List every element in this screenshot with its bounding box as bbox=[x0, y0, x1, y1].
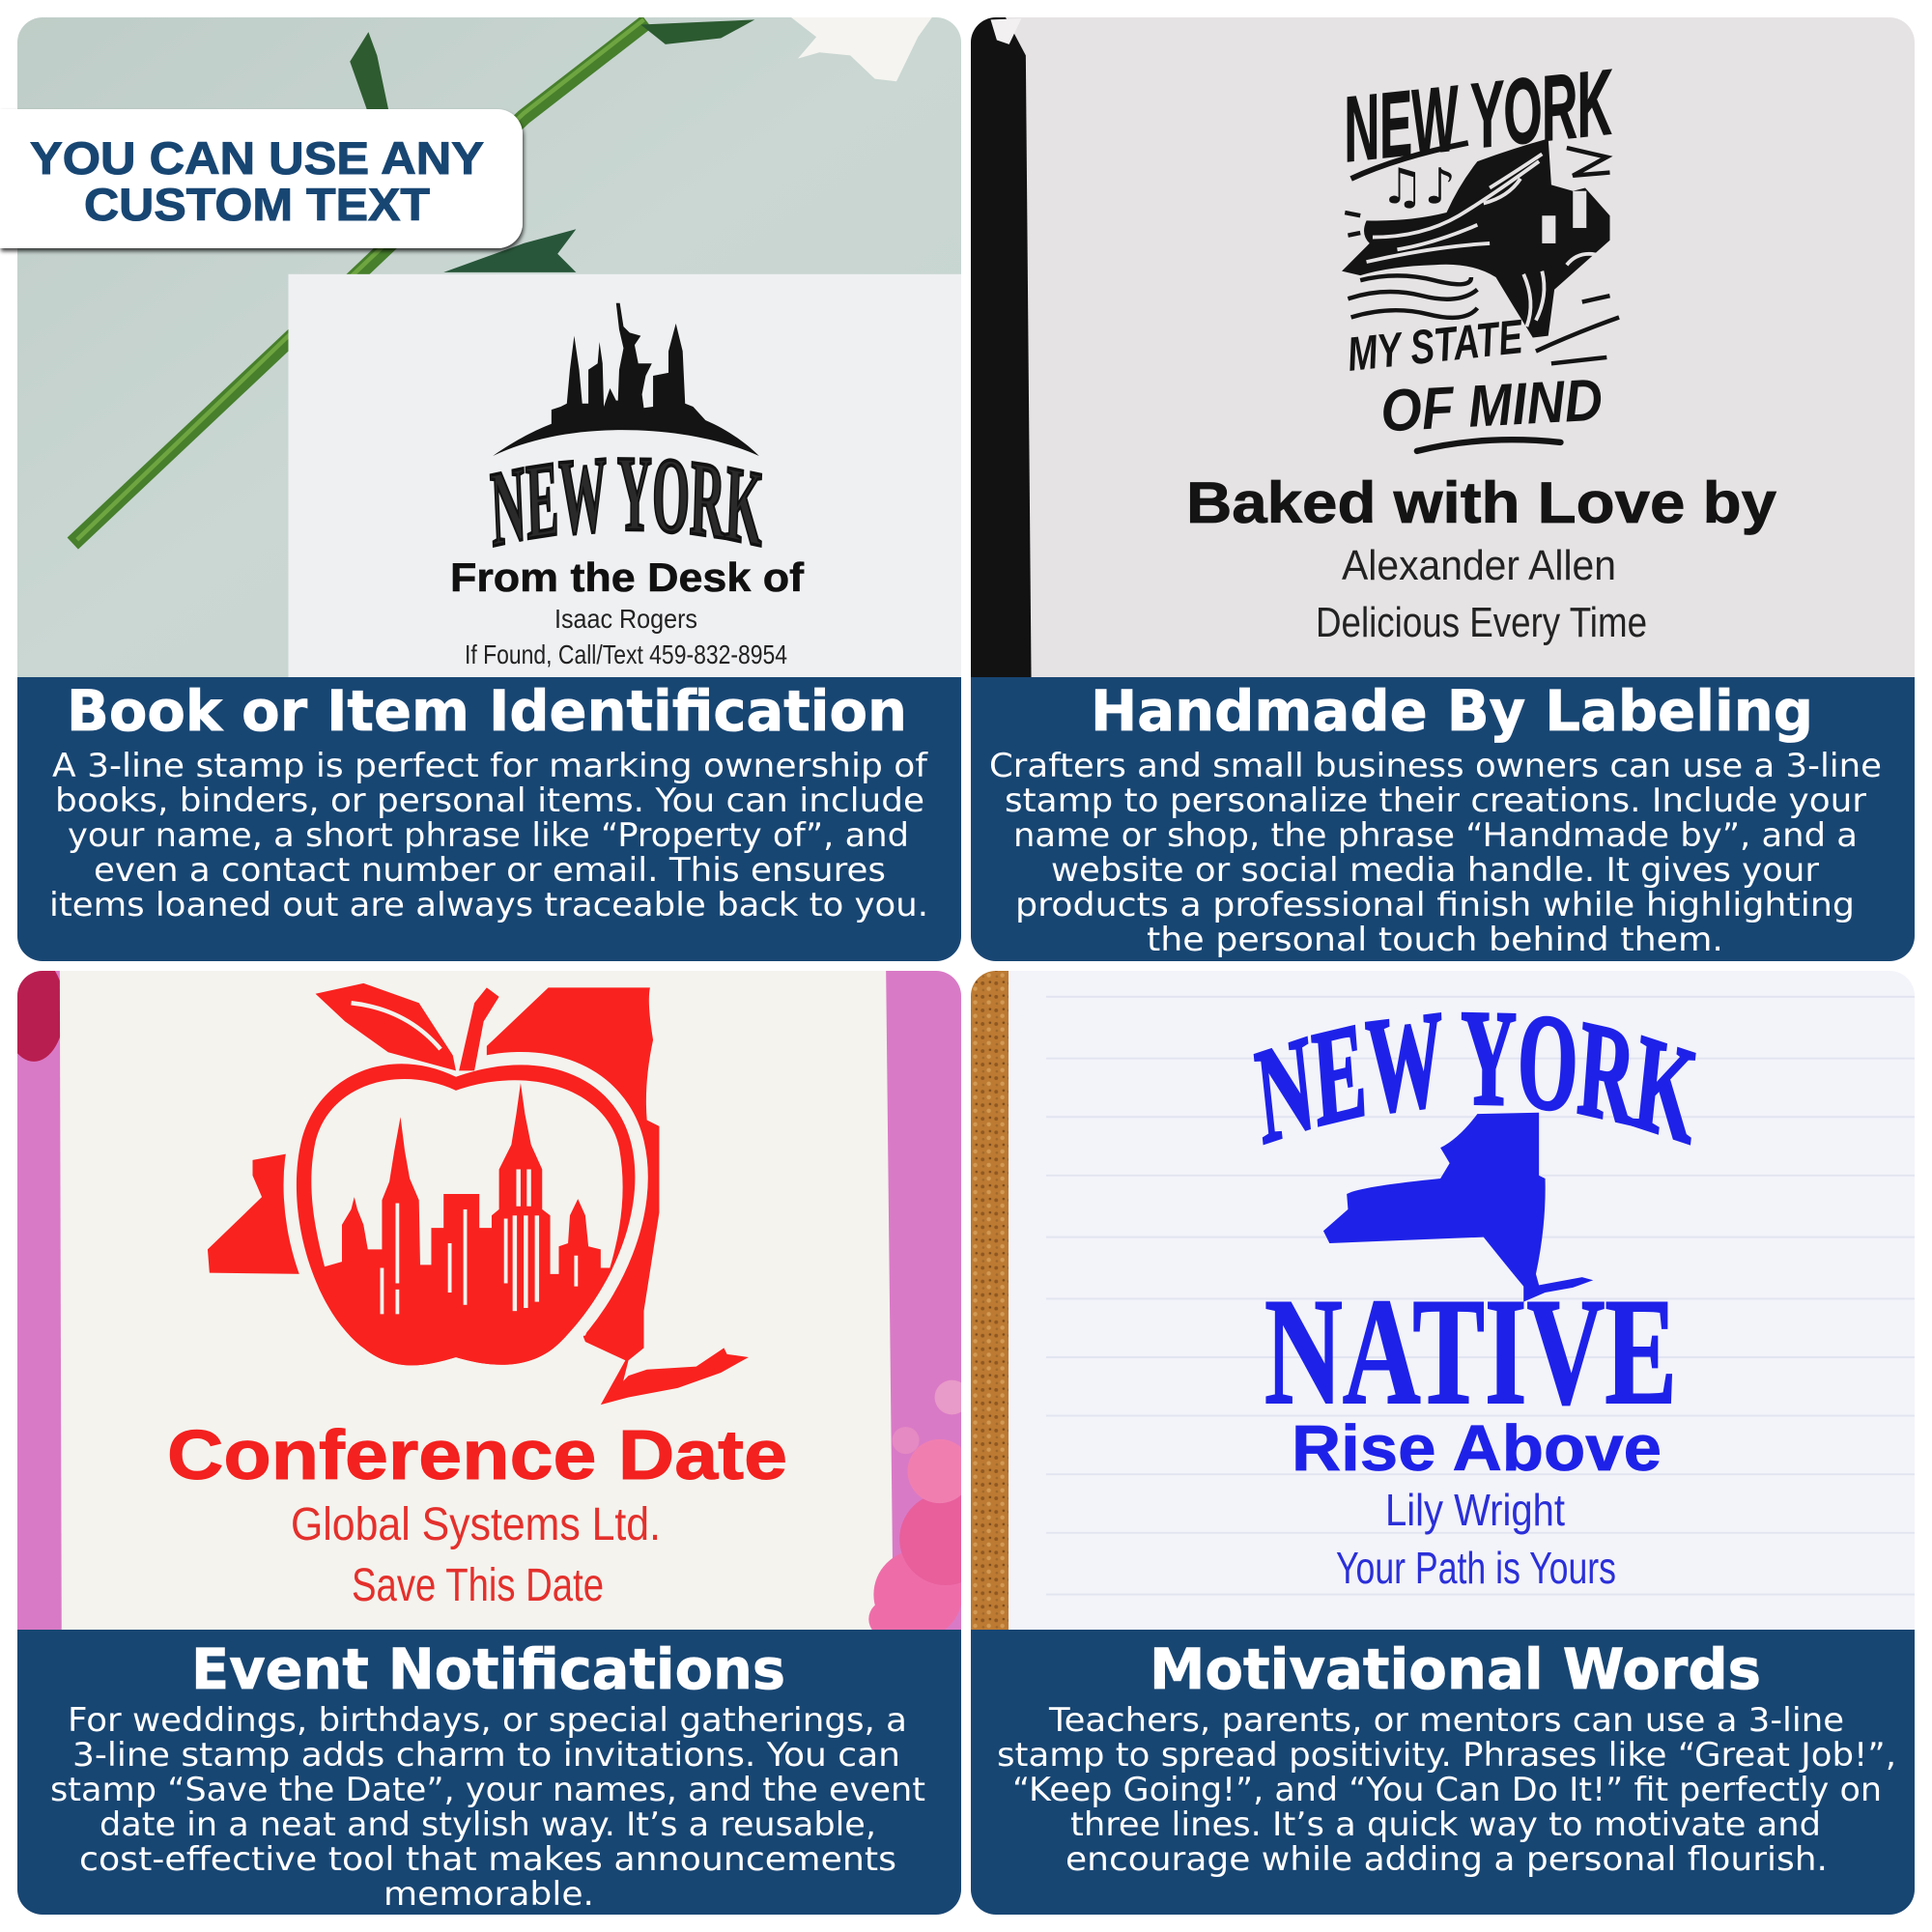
stamp text: Your Path is Yours: Your Path is Yours bbox=[1336, 1543, 1616, 1593]
stem bbox=[72, 21, 647, 544]
description bbox=[997, 1701, 1896, 1879]
photo: lined notepaper with cork edge bbox=[966, 966, 1927, 1637]
white flower bbox=[788, 15, 933, 81]
heading: Book or Item Identification bbox=[67, 678, 907, 744]
photo: paper with black binding bbox=[966, 13, 1927, 684]
description: memorable. bbox=[384, 1875, 594, 1914]
description: name or shop, the phrase “Handmade by”, and a bbox=[1013, 816, 1858, 855]
panel: motivational words bbox=[971, 971, 1915, 1915]
description: items loaned out are always traceable back to you. bbox=[49, 886, 928, 924]
card bbox=[288, 274, 972, 681]
description: stamp to spread positivity. Phrases like “Great Job!”, bbox=[997, 1736, 1896, 1775]
stamp text: Save This Date: Save This Date bbox=[352, 1560, 604, 1611]
stamp text: Baked with Love by: Baked with Love by bbox=[1186, 470, 1777, 535]
stamp text: From the Desk of: From the Desk of bbox=[450, 554, 805, 600]
stamp: New York state woodcut art: NEW YORK bbox=[1338, 50, 1620, 182]
description: Teachers, parents, or mentors can use a 3-line bbox=[1048, 1701, 1844, 1740]
stamp text: Rise Above: Rise Above bbox=[1292, 1412, 1662, 1485]
stamp: apple and New York state emblem bbox=[208, 983, 749, 1405]
heading: Handmade By Labeling bbox=[1091, 678, 1813, 744]
description: even a contact number or email. This ensures bbox=[94, 851, 886, 890]
stamp text: Alexander Allen: Alexander Allen bbox=[1342, 542, 1616, 589]
caption bar bbox=[17, 1630, 961, 1915]
description: website or social media handle. It gives your bbox=[1051, 851, 1819, 890]
stamp text: Delicious Every Time: Delicious Every Time bbox=[1316, 599, 1647, 646]
description: three lines. It’s a quick way to motivate and bbox=[1070, 1805, 1821, 1844]
description: Crafters and small business owners can use a 3-line bbox=[989, 747, 1882, 785]
description: A 3-line stamp is perfect for marking ownership of bbox=[52, 747, 928, 785]
description bbox=[989, 747, 1882, 959]
description: For weddings, birthdays, or special gatherings, a bbox=[68, 1701, 907, 1740]
stamp text: Global Systems Ltd.: Global Systems Ltd. bbox=[291, 1499, 661, 1550]
badge text line 2: CUSTOM TEXT bbox=[84, 179, 430, 230]
description: encourage while adding a personal flourish. bbox=[1065, 1840, 1828, 1879]
dark flower bbox=[17, 971, 60, 1062]
badge: you can use any custom text bbox=[0, 109, 523, 248]
description bbox=[49, 747, 928, 924]
description: your name, a short phrase like “Property of”, and bbox=[68, 816, 909, 855]
photo: flower stem and white card with stamp bbox=[13, 13, 972, 684]
photo: card on pink background with flowers bbox=[3, 956, 992, 1638]
stamp: New York state silhouette bbox=[1323, 1113, 1593, 1302]
description: stamp “Save the Date”, your names, and the event bbox=[50, 1771, 925, 1809]
caption bar bbox=[971, 677, 1915, 961]
stamp text: Conference Date: Conference Date bbox=[167, 1417, 787, 1494]
description: “Keep Going!”, and “You Can Do It!” fit perfectly on bbox=[1012, 1771, 1882, 1809]
description bbox=[50, 1701, 925, 1914]
description: the personal touch behind them. bbox=[1147, 921, 1723, 959]
stamp text: NATIVE: NATIVE bbox=[1264, 1267, 1677, 1436]
stamp: skyline emblem bbox=[493, 303, 759, 456]
stamp: New York state woodcut art: MY STATE bbox=[1345, 309, 1526, 382]
stamp: New York state woodcut art: OF MIND bbox=[1379, 367, 1604, 443]
description: 3-line stamp adds charm to invitations. You can bbox=[72, 1736, 900, 1775]
stamp text: Isaac Rogers: Isaac Rogers bbox=[554, 604, 697, 634]
description: date in a neat and stylish way. It’s a reusable, bbox=[99, 1805, 876, 1844]
badge text line 1: YOU CAN USE ANY bbox=[30, 132, 484, 184]
heading: Event Notifications bbox=[191, 1636, 785, 1702]
stamp: arched NEW YORK: NEW YORK bbox=[1254, 1012, 1696, 1146]
panel: event notifications bbox=[3, 956, 992, 1915]
stamp text: contact: If Found, Call/Text 459-832-8954 bbox=[465, 639, 787, 669]
panel: book or item identification bbox=[17, 17, 961, 961]
heading: Motivational Words bbox=[1150, 1636, 1761, 1702]
description: products a professional finish while highlighting bbox=[1015, 886, 1855, 924]
stamp: arched NEW YORK lettering: NEW YORK bbox=[489, 457, 763, 548]
description: cost-effective tool that makes announcements bbox=[79, 1840, 896, 1879]
pink flowers bbox=[868, 1379, 961, 1630]
panel: handmade by labeling bbox=[966, 13, 1927, 961]
leaves bbox=[350, 32, 389, 114]
caption bar bbox=[17, 677, 961, 961]
description: books, binders, or personal items. You can include bbox=[55, 781, 924, 820]
stamp text: Lily Wright: Lily Wright bbox=[1385, 1485, 1565, 1535]
caption bar bbox=[971, 1630, 1915, 1915]
stamp: New York state woodcut art: ♫♪ bbox=[1380, 158, 1456, 215]
description: stamp to personalize their creations. Include your bbox=[1005, 781, 1866, 820]
stamp: New York state woodcut art bbox=[1338, 50, 1620, 451]
